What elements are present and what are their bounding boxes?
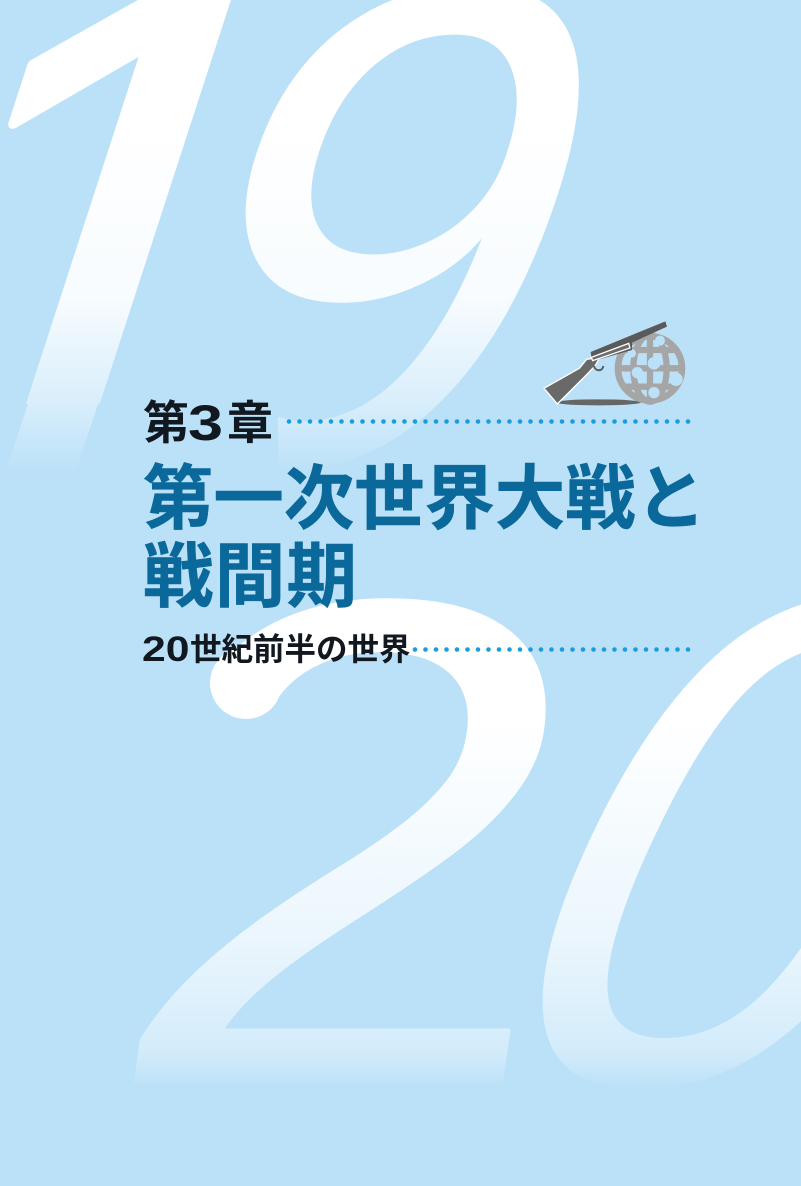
- subtitle: 20: [142, 631, 189, 669]
- main title: 戦間期: [143, 537, 357, 616]
- subtitle: 世紀前半の世界: [190, 631, 411, 667]
- chapter label: 第: [143, 397, 189, 449]
- dotted rule: subtitle line: [413, 647, 690, 652]
- chapter label: 章: [227, 397, 273, 449]
- rifle: [544, 321, 667, 404]
- dotted rule: chapter line: [287, 419, 690, 424]
- globe: [617, 335, 683, 402]
- icon: rifle leaning on globe: [544, 321, 683, 405]
- main title: [143, 459, 706, 616]
- shadow: [556, 399, 641, 405]
- large background year: 20: [135, 598, 801, 1076]
- large background year: 19: [8, 0, 579, 452]
- chapter label: [143, 396, 273, 451]
- main title: 第一次世界大戦と: [143, 459, 706, 538]
- chapter label: 3: [188, 396, 223, 451]
